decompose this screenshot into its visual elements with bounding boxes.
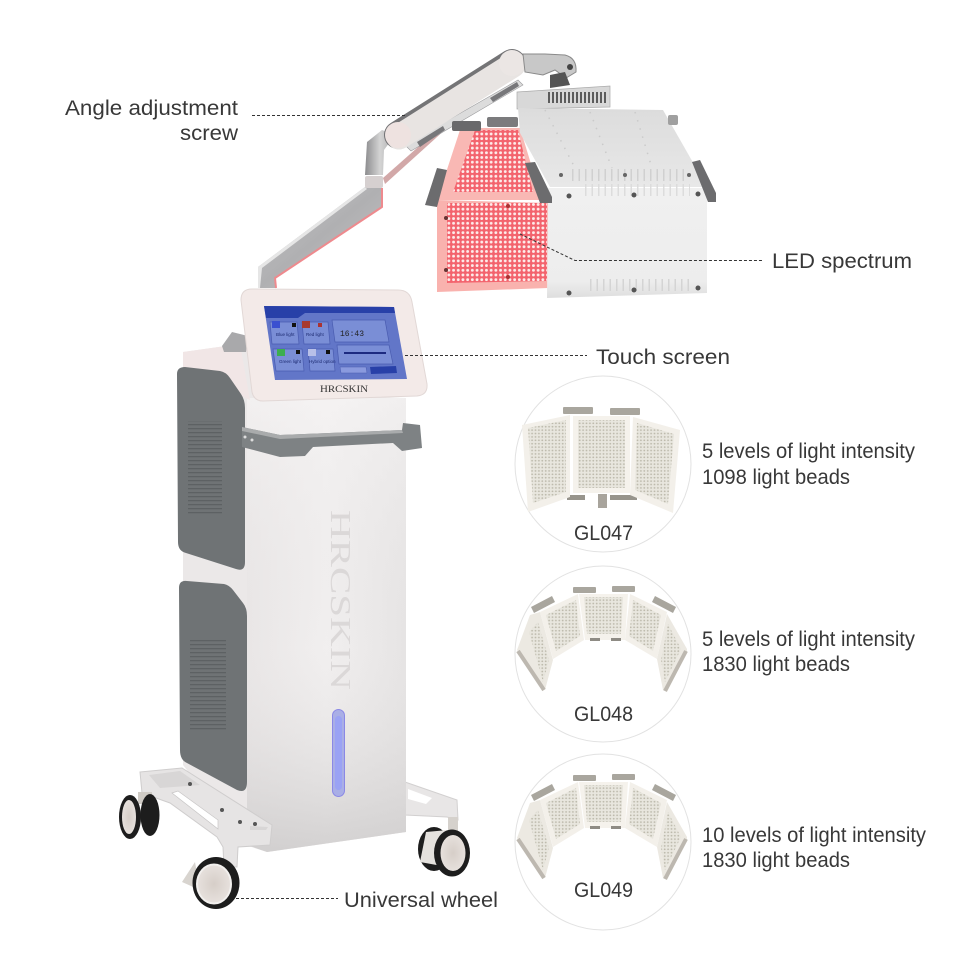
wheel right: [418, 817, 470, 876]
callout: angle adjustment screw: Angle adjustment: [65, 96, 238, 120]
model label: GL048: [574, 702, 633, 726]
handle: [242, 423, 422, 457]
screen display: Hybrid option: [309, 359, 336, 364]
white panel front: [547, 188, 707, 298]
machine: [119, 50, 716, 909]
spec text: 5 levels of light intensity: [702, 627, 915, 651]
base bracket right: [405, 782, 458, 820]
panel handles: [425, 115, 716, 207]
brand on body: HRCSKIN: [324, 510, 356, 690]
red LED panel upper: [437, 128, 542, 200]
circle: [515, 376, 691, 552]
spec text: [702, 627, 915, 676]
tower body: [183, 332, 406, 852]
wheel back left: [119, 792, 160, 839]
callout: LED spectrum: LED spectrum: [772, 249, 912, 273]
callout: touch screen: Touch screen: [596, 345, 730, 369]
screen display: Red light: [306, 332, 325, 337]
model GL049: [515, 754, 926, 930]
side panel upper: [177, 367, 245, 570]
white panel top: [518, 108, 707, 187]
callout: universal wheel: Universal wheel: [344, 888, 498, 912]
icon: five-panel light head: [517, 586, 687, 692]
circle: [515, 754, 691, 930]
icon: five-panel light head: [517, 774, 687, 880]
screen display: [264, 306, 407, 380]
screen display: 16:43: [340, 330, 364, 339]
model GL047: [515, 376, 915, 552]
brand on screen: HRCSKIN: [320, 384, 369, 394]
model label: GL049: [574, 878, 633, 902]
spec text: 1830 light beads: [702, 652, 850, 676]
model GL048: [515, 566, 915, 742]
spec text: 10 levels of light intensity: [702, 823, 926, 847]
wheel front left: [182, 857, 240, 909]
spec text: 5 levels of light intensity: [702, 439, 915, 463]
spec text: 1098 light beads: [702, 465, 850, 489]
articulated arm: [258, 50, 525, 288]
spec text: [702, 823, 926, 872]
side panel lower: [179, 581, 247, 791]
model label: GL047: [574, 521, 633, 545]
red LED panel lower: [437, 200, 548, 292]
spec text: [702, 439, 915, 489]
callout: angle adjustment screw: screw: [180, 121, 238, 145]
light strip: [332, 710, 344, 796]
circle: [515, 566, 691, 742]
icon: three-panel light head: [522, 407, 680, 513]
base bracket left: [140, 768, 272, 867]
head top box: [517, 86, 610, 109]
arm joint: [523, 54, 576, 88]
spec text: 1830 light beads: [702, 848, 850, 872]
screen display: Green light: [279, 359, 302, 364]
callout: LED spectrum: [520, 234, 912, 273]
screen display: Blue light: [276, 332, 295, 337]
touch screen: [241, 289, 427, 401]
callout: angle adjustment screw: [65, 96, 405, 145]
screen bezel: [241, 289, 427, 401]
